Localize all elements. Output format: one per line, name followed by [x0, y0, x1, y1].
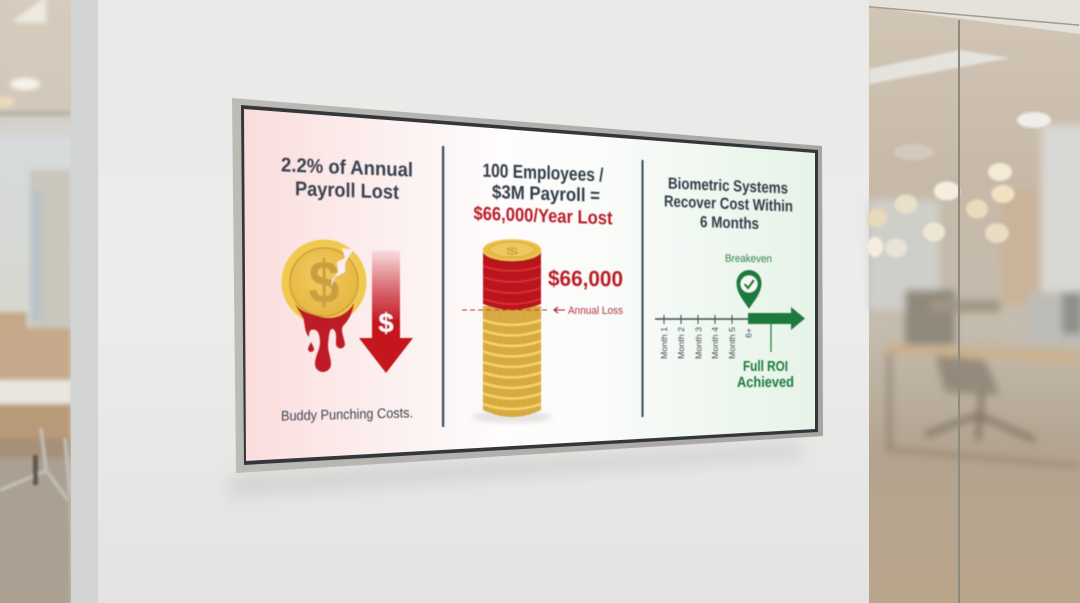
heading: biometric systems: Biometric Systems: [668, 175, 788, 198]
icon: red down arrow with dollar: $: [378, 308, 394, 338]
chart: coin stack: [472, 240, 552, 423]
gold coins: [483, 306, 541, 417]
panel: roi timeline: [655, 175, 805, 391]
timeline month labels: Month 3: [694, 326, 704, 359]
icon: location pin with check: [736, 270, 762, 309]
background: left glass office view: [0, 0, 75, 603]
heading: 2.2% of annual payroll lost: [281, 154, 413, 204]
screen content: [281, 146, 805, 427]
display frame: [232, 98, 823, 473]
panel: screen: [244, 109, 815, 461]
heading: biometric systems: [664, 175, 793, 233]
annual loss marker: [462, 305, 623, 317]
ceiling light panel: [869, 50, 1010, 84]
icon: cracked coin with blood: [282, 240, 366, 372]
caption: buddy punching costs: Buddy Punching Costs.: [281, 404, 413, 424]
label: full roi achieved: Full ROI: [743, 358, 788, 375]
divider: left: [442, 146, 444, 427]
wall shadow under display: [228, 442, 805, 498]
blood drips: [295, 303, 354, 372]
coin crack: [331, 248, 353, 287]
timeline month labels: Month 2: [677, 326, 686, 359]
glass door edge: [958, 20, 960, 603]
heading: 2.2% of annual payroll lost: 2.2% of Annual: [281, 154, 413, 182]
heading: employees and payroll: 100 Employees /: [482, 161, 604, 186]
divider: right: [642, 160, 644, 417]
timeline month labels: Month 5: [728, 326, 737, 359]
timeline axis: [655, 315, 749, 324]
label: full roi achieved: [737, 358, 794, 391]
background: right glass office view: [867, 0, 1080, 603]
panel: payroll lost: [281, 154, 413, 424]
heading: employees and payroll: [474, 161, 613, 230]
heading: employees and payroll: $66,000/Year Lost: [474, 204, 613, 230]
coin dollar sign: $: [308, 249, 340, 316]
top coin: [483, 240, 541, 260]
value: $66,000: $66,000: [548, 266, 623, 291]
green roi arrow: [748, 307, 805, 330]
heading: biometric systems: 6 Months: [700, 214, 759, 233]
red coins: [483, 250, 541, 310]
label: full roi achieved: Achieved: [737, 374, 794, 391]
heading: biometric systems: Recover Cost Within: [664, 193, 793, 216]
display bezel: [241, 105, 818, 465]
chair legs: [0, 428, 70, 500]
timeline month labels: Month 4: [711, 326, 720, 359]
timeline month labels: [660, 326, 754, 359]
label: breakeven: Breakeven: [725, 253, 772, 265]
heading: 2.2% of annual payroll lost: Payroll Lost: [295, 178, 399, 204]
chart: coin stack: $: [506, 245, 519, 257]
timeline month labels: 6+: [744, 328, 754, 338]
background: wall and pillar: [71, 0, 98, 603]
bokeh lights: [867, 144, 1014, 258]
annual loss marker: Annual Loss: [568, 305, 623, 317]
roi connector line: [770, 324, 772, 352]
timeline month labels: Month 1: [660, 326, 669, 359]
panel: annual loss: [462, 161, 623, 423]
heading: employees and payroll: $3M Payroll =: [492, 182, 600, 207]
icon: red down arrow with dollar: [359, 250, 413, 373]
